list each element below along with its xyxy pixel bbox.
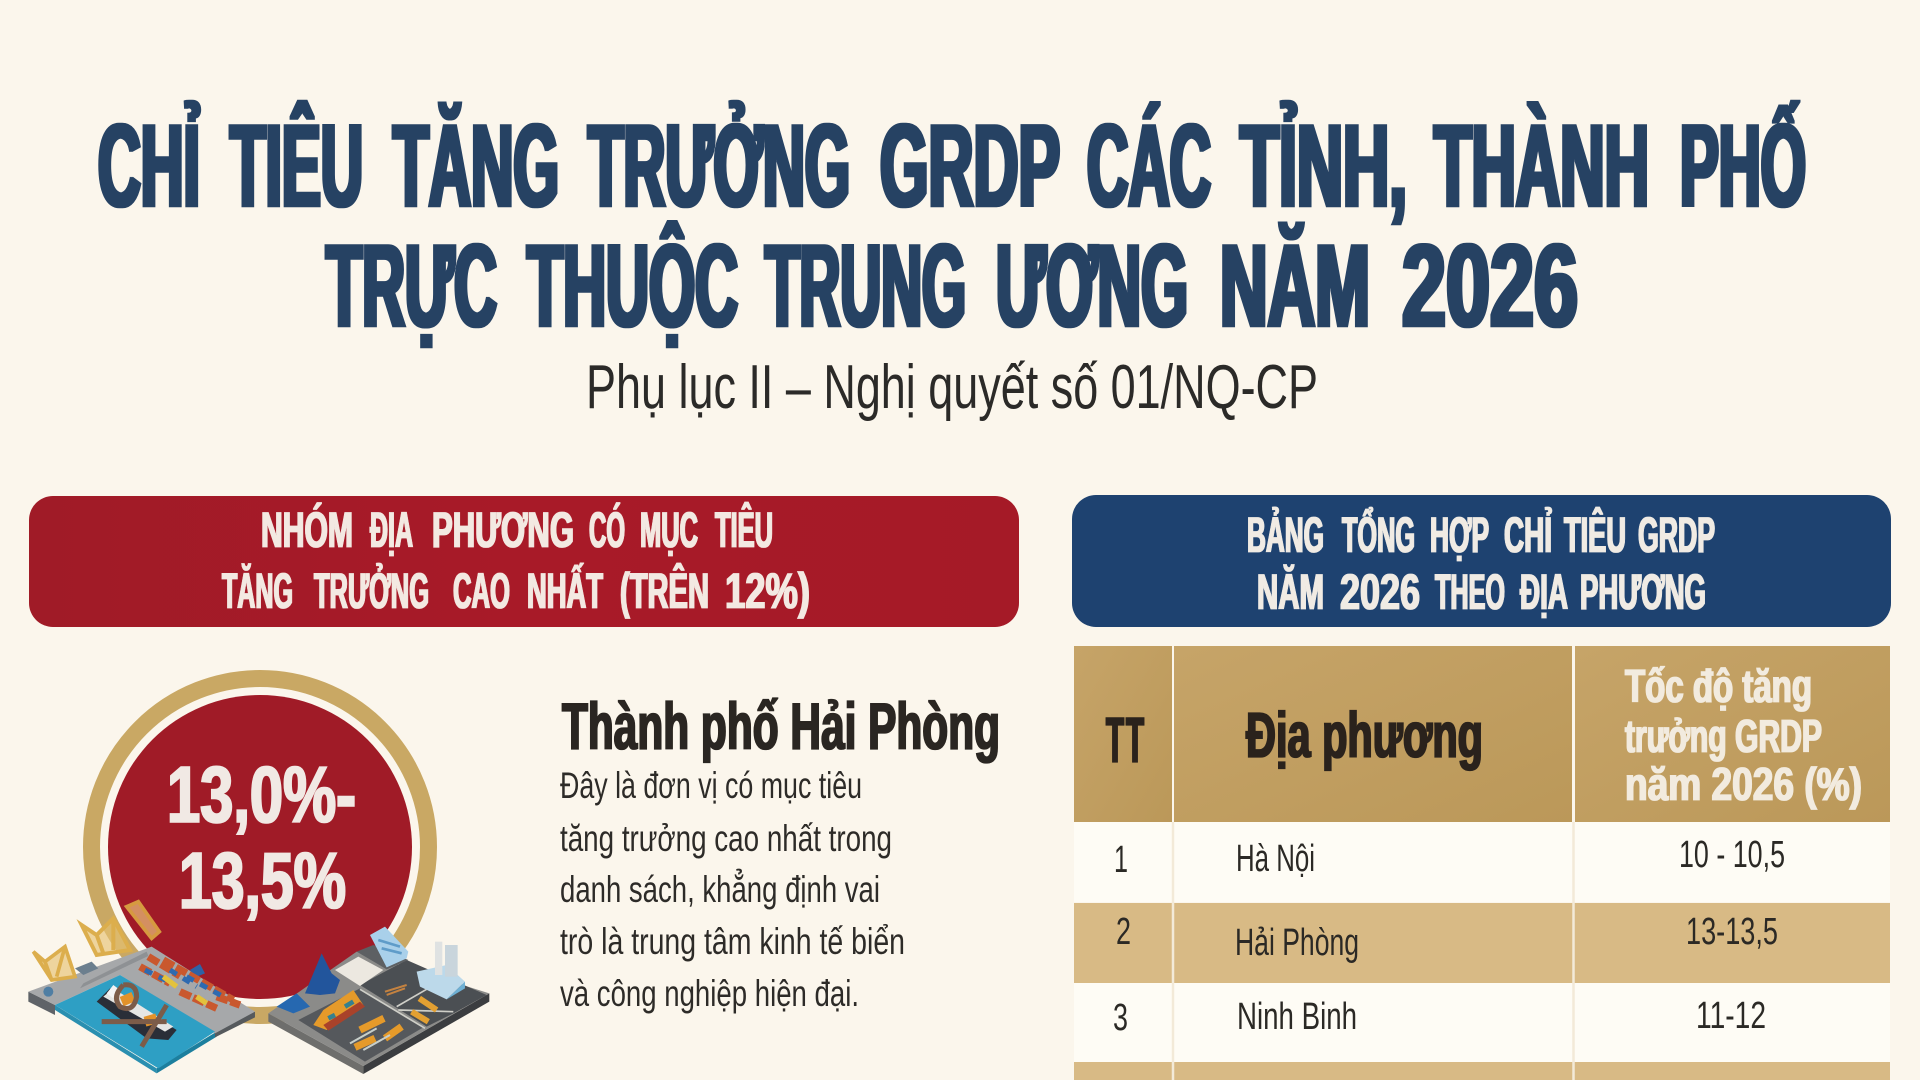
banner: highest growth heading: (TRÊN xyxy=(620,563,709,619)
title: TĂNG xyxy=(393,100,559,231)
banner: table heading: TỔNG xyxy=(1342,506,1415,563)
banner: table heading: CHỈ xyxy=(1504,507,1552,563)
icon: isometric industrial zone xyxy=(268,927,489,1074)
table: row 3 Ninh Bình: Ninh Binh xyxy=(1237,996,1357,1038)
banner: table heading: GRDP xyxy=(1638,507,1715,563)
text block: city description: trò là trung tâm kinh tế biển xyxy=(560,921,905,962)
text block: city description: tăng trưởng cao nhất trong xyxy=(560,818,892,859)
banner: table heading: 2026 xyxy=(1340,564,1420,620)
banner: table heading: PHƯƠNG xyxy=(1580,564,1706,620)
banner: table heading xyxy=(1072,495,1891,627)
banner: highest growth heading: PHƯƠNG xyxy=(432,502,574,558)
badge: growth target circle xyxy=(92,678,428,1016)
table: header row: Địa phương xyxy=(1246,699,1483,771)
title: TỈNH, xyxy=(1240,100,1407,231)
banner: highest growth heading: ĐỊA xyxy=(370,502,413,558)
title: NĂM xyxy=(1220,220,1370,351)
title xyxy=(98,100,1806,351)
title: CÁC xyxy=(1087,100,1211,231)
banner: highest growth heading: MỤC xyxy=(640,502,698,558)
banner: table heading: BẢNG xyxy=(1247,507,1324,563)
text block: city description: danh sách, khẳng định vai xyxy=(560,868,880,910)
text block: city description: Đây là đơn vị có mục tiêu xyxy=(560,765,862,806)
banner: table heading: THEO xyxy=(1435,564,1505,620)
banner: highest growth heading: TIÊU xyxy=(715,502,773,558)
banner: table heading: TIÊU xyxy=(1564,507,1626,563)
table: row 3 Ninh Bình: 11-12 xyxy=(1696,995,1766,1037)
title: TRƯỞNG xyxy=(588,100,850,231)
table: header row: T xyxy=(1126,704,1144,776)
banner: table heading: HỢP xyxy=(1430,507,1489,563)
table: row 3 Ninh Bình xyxy=(1074,983,1890,1062)
title: THÀNH xyxy=(1434,100,1649,231)
banner: highest growth heading: TĂNG xyxy=(222,563,293,619)
table: row 2 Hải Phòng xyxy=(1074,903,1890,983)
text block: city description: và công nghiệp hiện đại. xyxy=(560,973,859,1014)
table: header row: Tốc độ tăng xyxy=(1625,660,1812,712)
table: header row: T xyxy=(1106,704,1124,776)
banner: highest growth heading: CÓ xyxy=(589,502,625,558)
banner: table heading: NĂM xyxy=(1257,564,1324,620)
table: row 1 Hà Nội: 10 - 10,5 xyxy=(1679,834,1785,876)
title: THUỘC xyxy=(527,220,738,351)
panel: highest growth group xyxy=(28,496,1019,1074)
table: row 1 Hà Nội: Hà Nội xyxy=(1236,838,1315,880)
table: row 1 Hà Nội: 1 xyxy=(1114,839,1128,881)
table: row 4 xyxy=(1074,1062,1890,1080)
banner: highest growth heading xyxy=(29,496,1019,627)
title: CHỈ xyxy=(98,100,200,231)
banner: highest growth heading: NHÓM xyxy=(261,502,353,558)
badge: growth target circle: 13,0%- xyxy=(167,750,356,839)
table: row 2 Hải Phòng: Hải Phòng xyxy=(1235,922,1359,964)
title: TRỰC xyxy=(326,220,497,351)
table: row 2 Hải Phòng: 2 xyxy=(1116,911,1131,953)
banner: highest growth heading: CAO xyxy=(453,563,510,619)
table: header row: trưởng GRDP xyxy=(1625,710,1822,762)
text block: city description xyxy=(560,765,905,1014)
banner: table heading: ĐỊA xyxy=(1520,564,1568,620)
table: row 3 Ninh Bình: 3 xyxy=(1113,997,1128,1039)
table: header row: năm 2026 (%) xyxy=(1625,758,1862,810)
panel: GRDP summary table xyxy=(1072,495,1891,1080)
table: row 1 Hà Nội xyxy=(1074,822,1890,902)
heading: city name: Thành phố Hải Phòng xyxy=(562,689,1000,763)
table: header row xyxy=(1074,646,1890,822)
banner: highest growth heading: TRƯỞNG xyxy=(314,562,429,619)
title: ƯƠNG xyxy=(996,220,1188,351)
icon: isometric port xyxy=(28,902,255,1073)
banner: highest growth heading: NHẤT xyxy=(527,563,603,619)
badge: growth target circle: 13,5% xyxy=(179,836,346,925)
subtitle: Phụ lục II – Nghị quyết số 01/NQ-CP xyxy=(586,353,1318,422)
banner: highest growth heading: 12%) xyxy=(725,563,810,619)
title: TRUNG xyxy=(765,220,966,351)
title: TIÊU xyxy=(230,100,363,231)
table: row 2 Hải Phòng: 13-13,5 xyxy=(1686,911,1778,953)
title: 2026 xyxy=(1402,220,1578,351)
title: GRDP xyxy=(880,100,1060,231)
